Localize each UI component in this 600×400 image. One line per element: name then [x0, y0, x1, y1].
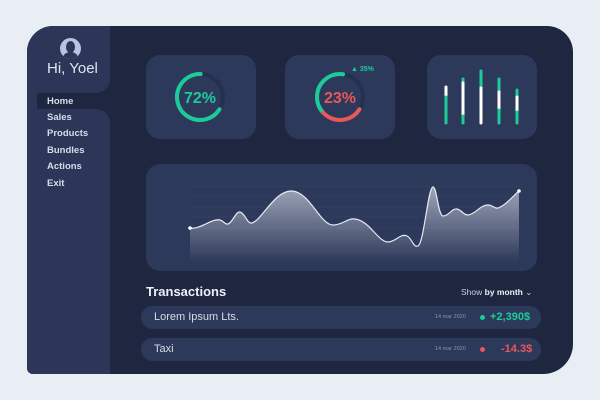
dashboard frame [27, 26, 573, 374]
transaction row: Taxi: 14 mar 2020 [435, 346, 466, 352]
line chart panel [146, 164, 537, 271]
avatar icon [60, 38, 81, 59]
nav: Exit: Exit [47, 178, 64, 189]
card: 23% donut: 23% [324, 90, 356, 107]
nav: Sales: Sales [47, 112, 72, 123]
transactions heading: Transactions [146, 284, 226, 299]
transaction row: Lorem Ipsum: Lorem Ipsum Lts. [154, 311, 239, 323]
nav: Home: Home [47, 96, 73, 107]
transaction row: Lorem Ipsum: +2,390$ [490, 311, 530, 323]
card: 72% donut [146, 55, 256, 139]
transaction row: Taxi: -14.3$ [501, 343, 532, 355]
active nav pill [37, 94, 110, 109]
card: bar indicators [427, 55, 537, 139]
card: 72% donut: 72% [184, 90, 216, 107]
greeting: Hi, Yoel [47, 60, 98, 77]
card: 23% donut [285, 55, 395, 139]
card: 23% donut: ▲ 35% [351, 66, 375, 73]
sidebar [27, 26, 110, 374]
transaction row: Taxi [141, 338, 541, 361]
transaction row: Lorem Ipsum: 14 mar 2020 [435, 314, 466, 320]
transaction row: Taxi: Taxi [154, 343, 174, 355]
nav: Bundles: Bundles [47, 145, 84, 156]
show by month filter: Show by month ⌄ [461, 287, 532, 297]
nav: Products: Products [47, 128, 88, 139]
nav: Actions: Actions [47, 161, 82, 172]
transaction row: Lorem Ipsum [141, 306, 541, 329]
